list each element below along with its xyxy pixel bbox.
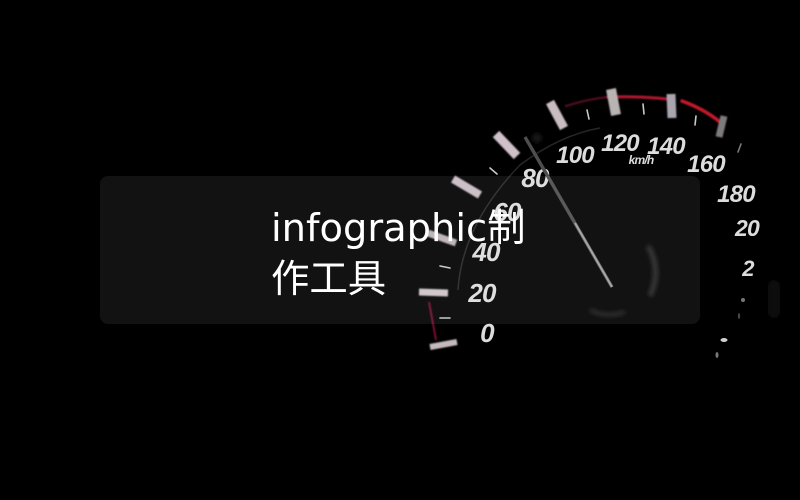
needle hub ring: [590, 246, 656, 315]
speed numbers: 0: [480, 318, 495, 348]
speed numbers: 140: [647, 133, 686, 160]
speed numbers: 40: [471, 237, 501, 267]
inner dial ring: [458, 128, 600, 290]
speed numbers: 120: [601, 130, 640, 157]
title: infographic制作工具: [271, 206, 526, 302]
speed numbers: 60: [493, 197, 522, 227]
red line: low-speed arc: [429, 302, 436, 340]
minor ticks: [440, 104, 741, 318]
faded right-side marks: [716, 280, 780, 358]
speed numbers: 2: [741, 256, 755, 281]
speed numbers: 100: [556, 142, 595, 169]
major ticks: [419, 89, 724, 347]
speed numbers: 20: [467, 278, 497, 308]
translucent title panel: [100, 176, 700, 324]
speed numbers: 160: [687, 151, 726, 178]
speed numbers: 80: [521, 163, 550, 193]
red line: high-speed arc: [566, 97, 720, 122]
speed numbers: 20: [734, 215, 760, 241]
speed numbers: 180: [717, 181, 756, 208]
needle: [525, 133, 612, 287]
speed numbers: [467, 130, 760, 348]
speed numbers: km/h: [629, 153, 654, 167]
